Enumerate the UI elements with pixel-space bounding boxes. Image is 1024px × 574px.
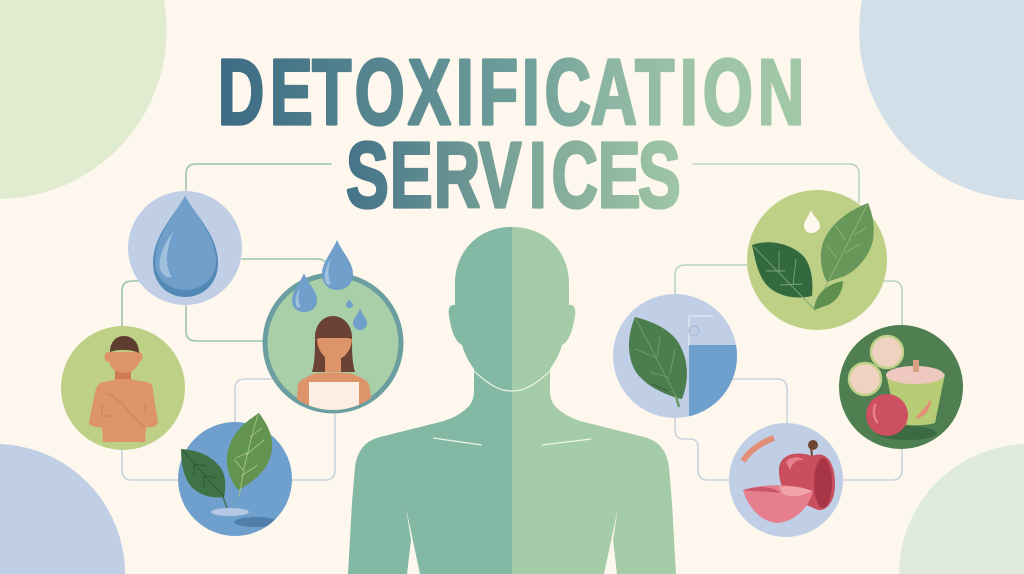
icon: leaves on blue circle <box>178 413 292 536</box>
body: left half <box>348 227 512 574</box>
central body silhouette <box>348 227 676 574</box>
body: right half <box>512 227 676 574</box>
icon: leaf and water circle <box>613 294 739 425</box>
icon: man circle <box>61 326 185 450</box>
corner circle: bottom left <box>0 444 125 574</box>
icon: woman circle with drops <box>265 240 401 420</box>
title line 1: DETOXIFICATION <box>218 40 804 144</box>
body: chin and collarbone lines <box>433 370 591 445</box>
icon: apple peel strip <box>743 438 774 461</box>
title line 2: SERVICES <box>346 123 681 227</box>
title <box>218 40 804 227</box>
connector lines <box>122 164 902 480</box>
icon: foods on dark green circle <box>839 325 963 449</box>
icon: water drop circle <box>128 191 242 305</box>
white drop <box>804 210 820 233</box>
icon: drops above woman <box>292 240 367 330</box>
corner circle: bottom right <box>899 444 1024 574</box>
corner circle: top right <box>859 0 1024 200</box>
icon: apple and bowl circle <box>729 423 843 537</box>
corner circle: top left <box>0 0 167 199</box>
icon: green leaves circle <box>747 190 887 330</box>
